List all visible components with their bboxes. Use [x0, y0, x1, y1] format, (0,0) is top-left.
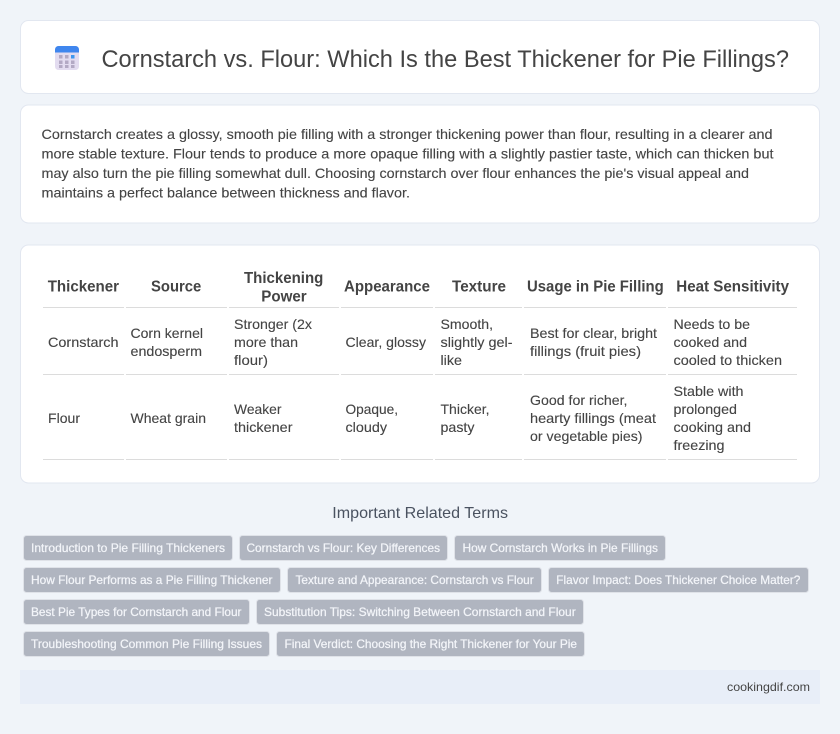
table row: cornstarch: cooked and	[674, 334, 747, 350]
title: Cornstarch vs. Flour: Which Is the Best Thickener for Pie Fillings?	[102, 46, 789, 73]
table header: Texture	[452, 278, 506, 296]
footer source: cookingdif.com	[727, 680, 810, 694]
table row: cornstarch: endosperm	[130, 343, 202, 359]
table header: Power	[261, 288, 307, 306]
tag	[24, 536, 232, 560]
tag	[24, 568, 280, 592]
table header: Thickener	[48, 278, 119, 296]
table row: cornstarch: Needs to be	[674, 316, 750, 332]
table row: cornstarch: Clear, glossy	[346, 334, 426, 350]
footer	[20, 670, 820, 704]
table row: cornstarch: fillings (fruit pies)	[530, 343, 641, 359]
table row: flour: prolonged	[674, 401, 737, 417]
table header	[48, 270, 789, 306]
panel: header	[20, 20, 820, 94]
related terms tags	[24, 536, 808, 656]
panel: comparison table	[20, 245, 820, 483]
table row: flour: Wheat grain	[130, 410, 206, 426]
icon: calendar	[55, 46, 79, 70]
tag	[288, 568, 542, 592]
text block: introduction paragraph	[42, 126, 774, 200]
table row: flour: pasty	[440, 419, 474, 435]
table row: flour	[48, 383, 751, 453]
tag: Introduction to Pie Filling Thickeners	[31, 541, 225, 555]
tag: Cornstarch vs Flour: Key Differences	[246, 541, 440, 555]
tag: Substitution Tips: Switching Between Cornstarch and Flour	[264, 605, 576, 619]
tag: Troubleshooting Common Pie Filling Issues	[31, 637, 262, 651]
table header: Source	[151, 278, 201, 296]
tag	[548, 568, 808, 592]
tag	[240, 536, 448, 560]
table row: flour: Good for richer,	[530, 392, 628, 408]
table row: cornstarch: cooled to thicken	[674, 352, 782, 368]
text block: introduction paragraph: maintains a perfect balance between thickness and flavor.	[42, 184, 410, 200]
text block: introduction paragraph: Cornstarch creates a glossy, smooth pie filling with a stronger thickening power than flour, resulting in a clearer and	[42, 126, 772, 142]
panel: introduction	[20, 105, 820, 223]
table header: Usage in Pie Filling	[527, 278, 664, 296]
table row: flour: cloudy	[346, 419, 387, 435]
table header: Heat Sensitivity	[676, 278, 789, 296]
tag: Flavor Impact: Does Thickener Choice Matter?	[556, 573, 801, 587]
tag: Final Verdict: Choosing the Right Thickener for Your Pie	[284, 637, 577, 651]
tag	[24, 632, 270, 656]
table row: cornstarch: like	[440, 352, 462, 368]
table row: flour: Stable with	[674, 383, 744, 399]
table row: flour: cooking and	[674, 419, 751, 435]
table row: cornstarch	[48, 316, 782, 368]
table row: flour: thickener	[234, 419, 293, 435]
tag	[454, 536, 666, 560]
table row: cornstarch: Best for clear, bright	[530, 325, 657, 341]
table row: cornstarch: Smooth,	[440, 316, 493, 332]
table row: flour: or vegetable pies)	[530, 428, 642, 444]
table row: cornstarch: Corn kernel	[130, 325, 203, 341]
text block: introduction paragraph: more stable texture. Flour tends to produce a more opaque filling with a slightly pastier taste, which can thicken but	[42, 146, 774, 162]
table row: flour: Weaker	[234, 401, 282, 417]
table row: cornstarch: more than	[234, 334, 298, 350]
table row: flour: Opaque,	[346, 401, 398, 417]
tag: How Flour Performs as a Pie Filling Thickener	[31, 573, 272, 587]
tag	[24, 600, 250, 624]
table row: flour: Flour	[48, 410, 80, 426]
tag	[276, 632, 584, 656]
table row: flour: Thicker,	[440, 401, 490, 417]
table header: Thickening	[244, 270, 323, 287]
tag	[256, 600, 584, 624]
table row: cornstarch: Cornstarch	[48, 334, 118, 350]
table row: flour: hearty fillings (meat	[530, 410, 656, 426]
tag: How Cornstarch Works in Pie Fillings	[462, 541, 658, 555]
tag: Best Pie Types for Cornstarch and Flour	[31, 605, 242, 619]
heading: related terms: Important Related Terms	[332, 505, 508, 522]
table row: cornstarch: slightly gel-	[440, 334, 513, 350]
tag: Texture and Appearance: Cornstarch vs Flour	[296, 573, 534, 587]
text block: introduction paragraph: may also turn the pie filling somewhat dull. Choosing cornstarch over flour enhances the pie's visual appeal and	[42, 165, 749, 181]
table row: flour: freezing	[674, 437, 724, 453]
table row: cornstarch: flour)	[234, 352, 268, 368]
table header: Appearance	[344, 278, 430, 296]
table row: cornstarch: Stronger (2x	[234, 316, 312, 332]
